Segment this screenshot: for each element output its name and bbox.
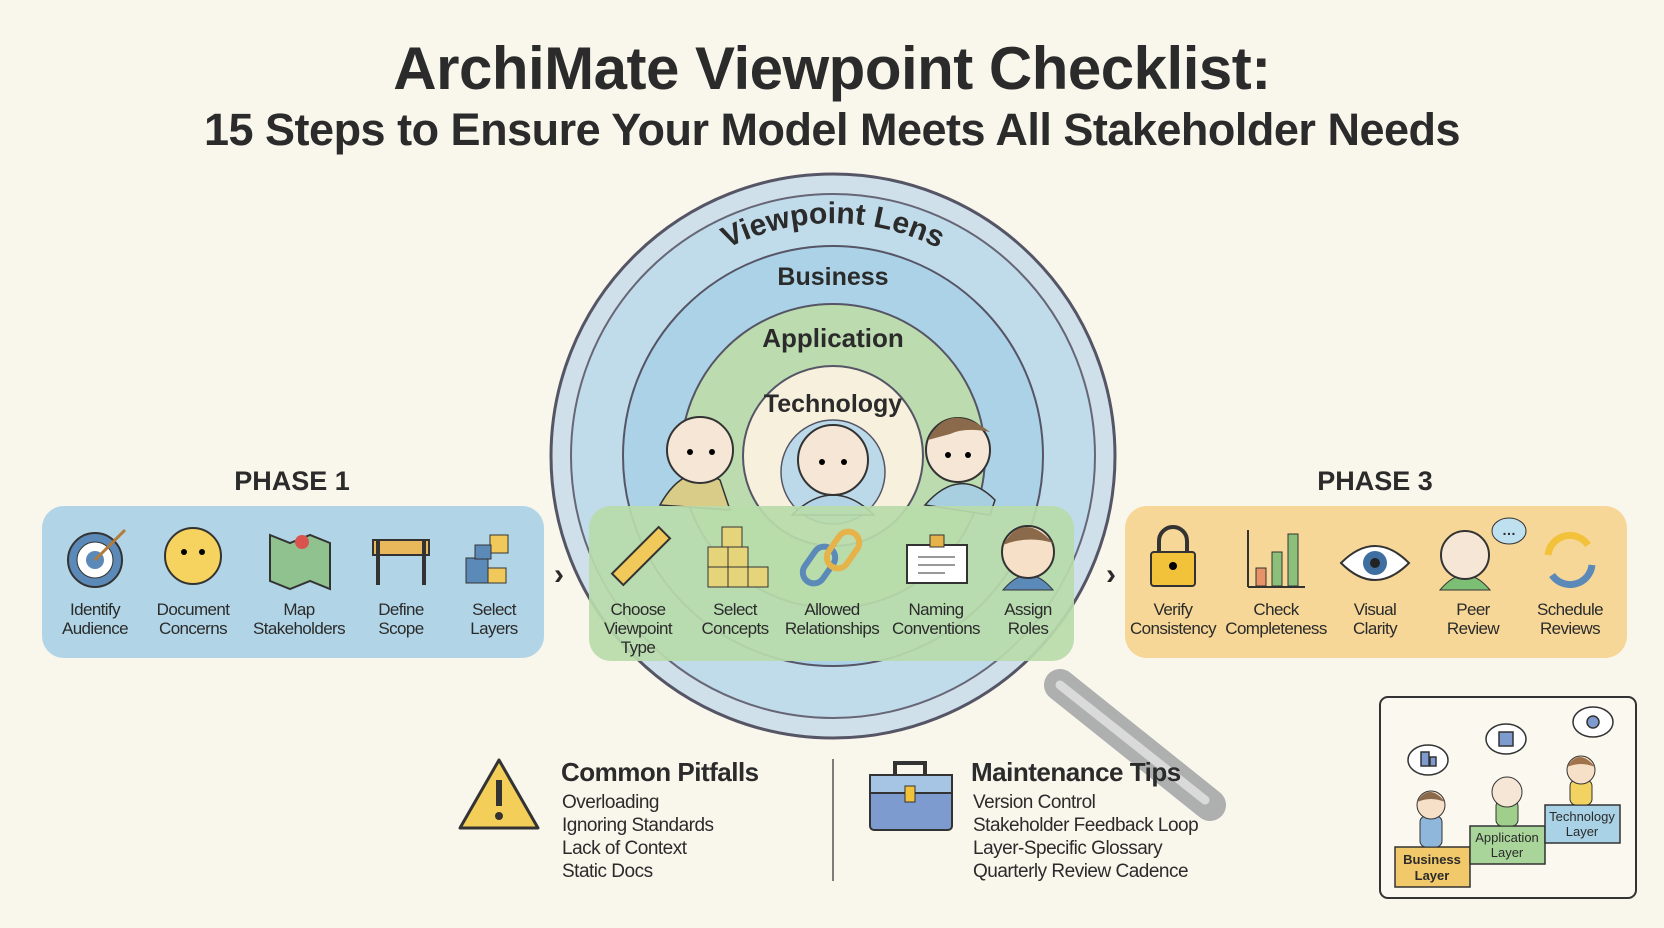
text block: common pitfalls: Common Pitfalls [561,757,759,787]
thought bubbles [1408,707,1613,775]
people on steps [1417,756,1595,847]
labels phase 2: Concepts [701,619,769,638]
labels phase 2: Naming [909,600,964,619]
icon: bar chart [1248,530,1305,587]
text block: common pitfalls: Static Docs [562,861,653,882]
icon: badge [907,535,967,583]
icon: reviewer: … [1502,522,1516,538]
labels phase 3: Schedule [1537,600,1603,619]
labels phase 3 [1130,600,1603,638]
step: business layer [1395,847,1470,887]
arrow 1: › [554,558,564,591]
icon: barrier [373,540,429,585]
labels phase 2: Relationships [785,619,879,638]
labels phase 2: Select [713,600,758,619]
labels phase 3: Completeness [1225,619,1327,638]
labels phase 3: Verify [1154,600,1194,619]
step: application layer: Application [1475,830,1539,845]
title [204,35,1460,155]
labels phase 2: Conventions [892,619,980,638]
step: business layer: Layer [1415,868,1449,883]
icon: target [68,530,125,587]
icon: thinking face [165,528,221,584]
labels phase 1: Select [472,600,517,619]
icon: layers blocks [466,535,508,583]
labels phase 2: Allowed [804,600,860,619]
panel: phase 3 [1125,506,1627,658]
labels phase 2: Viewpoint [604,619,673,638]
labels phase 1: Map [283,600,315,619]
text block: common pitfalls: Ignoring Standards [562,815,714,836]
labels phase 1: Concerns [159,619,227,638]
panel: layer stairs [1380,697,1636,898]
labels phase 3: Clarity [1353,619,1398,638]
arrow 2: › [1106,558,1116,591]
labels phase 2: Assign [1004,600,1052,619]
lens labels: Business [777,263,889,291]
icon: person [1002,526,1054,590]
step: business layer: Business [1403,852,1461,867]
text block: maintenance tips: Maintenance Tips [971,757,1181,787]
labels phase 1: Identify [70,600,121,619]
step: application layer: Layer [1491,845,1524,860]
labels phase 2: Type [621,638,655,657]
magnifying glass lens [511,172,1226,831]
icon: padlock [1151,527,1195,586]
labels phase 2: Roles [1008,619,1048,638]
labels phase 3: Peer [1456,600,1491,619]
icon: toolbox [870,763,952,830]
labels phase 3: Reviews [1540,619,1600,638]
lens labels: Application [762,323,904,353]
labels phase 1: Document [157,600,230,619]
text block: maintenance tips [971,757,1198,882]
icon: ruler [612,527,670,585]
icon: refresh arrows [1548,535,1592,585]
text block: maintenance tips: Layer-Specific Glossary [973,838,1163,859]
people in lens [660,417,995,515]
text block: common pitfalls: Overloading [562,792,659,813]
icon: chain link [799,527,863,588]
icon: reviewer [1440,518,1526,590]
text block: common pitfalls: Lack of Context [562,838,688,859]
icon: map [270,535,330,589]
lens labels: Technology [764,390,902,418]
icon: warning triangle [460,760,538,828]
labels phase 1: Scope [378,619,424,638]
step: application layer [1470,826,1545,864]
panel: phase 1 [42,506,544,658]
title: ArchiMate Viewpoint Checklist: [393,35,1271,102]
labels phase 3: Check [1253,600,1300,619]
step: technology layer: Technology [1549,809,1615,824]
step: technology layer [1545,805,1620,843]
text block: maintenance tips: Version Control [973,792,1095,813]
handle [1060,685,1210,805]
labels phase 1: Layers [470,619,518,638]
phase 1 label: PHASE 1 [234,466,350,496]
panel: phase 2 [589,506,1074,661]
icon: eye [1341,546,1409,580]
labels phase 1 [62,600,518,638]
icon: blocks [708,527,768,587]
text block: maintenance tips: Quarterly Review Cadence [973,861,1188,882]
lens labels: Viewpoint Lens [718,201,942,246]
labels phase 1: Audience [62,619,128,638]
labels phase 3: Review [1447,619,1500,638]
labels phase 3: Visual [1354,600,1396,619]
labels phase 1: Define [378,600,424,619]
labels phase 2: Choose [610,600,666,619]
phase 3 label: PHASE 3 [1317,466,1433,496]
text block: common pitfalls [561,757,759,882]
labels phase 2 [604,600,1052,657]
title: 15 Steps to Ensure Your Model Meets All Stakeholder Needs [204,104,1460,155]
labels phase 3: Consistency [1130,619,1217,638]
lens labels [718,201,942,418]
text block: maintenance tips: Stakeholder Feedback Loop [973,815,1198,836]
step: technology layer: Layer [1566,824,1599,839]
labels phase 1: Stakeholders [253,619,345,638]
